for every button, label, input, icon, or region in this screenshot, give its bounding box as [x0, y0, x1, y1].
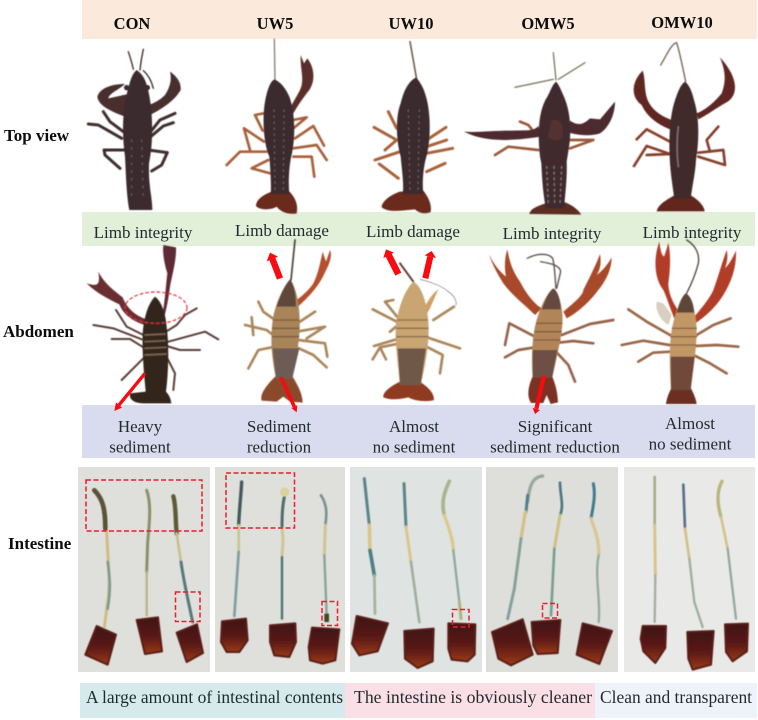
row label: Intestine: Intestine [8, 534, 72, 553]
crayfish abdomen: UW5 [245, 240, 331, 403]
caption: UW5 limb: Limb damage [235, 221, 329, 240]
crayfish top view: OMW10 [634, 43, 735, 211]
bottom summary: clean and transparent: Clean and transparent [600, 687, 752, 707]
caption: UW10 sediment: no sediment [373, 438, 456, 456]
crayfish abdomen: UW10 [373, 263, 460, 401]
green band: limb status [82, 212, 755, 246]
caption: OMW10 sediment: Almost [665, 414, 715, 433]
crayfish abdomen: OMW10 [622, 240, 738, 404]
crayfish top view: UW10 [374, 42, 453, 213]
column label: OMW10: OMW10 [651, 13, 713, 32]
row label: Abdomen: Abdomen [3, 322, 74, 341]
intestines [104, 530, 109, 627]
red arrow: CON sediment [114, 372, 146, 411]
caption: UW5 sediment: reduction [247, 438, 312, 456]
bottom summary: obviously cleaner [345, 683, 595, 718]
caption: OMW10 sediment: no sediment [649, 434, 732, 454]
bottom summary: large contents [80, 683, 345, 718]
column label: UW5: UW5 [257, 14, 293, 33]
caption: OMW5 sediment: Significant [518, 417, 592, 436]
caption: OMW5 sediment: sediment reduction [490, 438, 620, 456]
red arrow: UW10 right limb damage [422, 251, 436, 279]
caption: UW10 limb: Limb damage [366, 222, 460, 241]
red arrow: UW5 sediment [279, 377, 297, 412]
red dashed boxes on intestines [86, 473, 558, 627]
caption: UW5 sediment: Sediment [247, 417, 311, 436]
intestine photo panel: UW10 [350, 467, 482, 672]
purple band: sediment status [82, 405, 755, 458]
crayfish top view: CON [88, 49, 181, 210]
red arrow: UW5 limb damage [267, 253, 283, 280]
crayfish top view: UW5 [227, 39, 327, 214]
bottom summary: clean and transparent [595, 683, 757, 718]
caption: CON sediment: sediment [109, 438, 171, 456]
intestine photo panel: OMW10 [624, 467, 755, 672]
header band [82, 0, 757, 39]
crayfish abdomen: CON [87, 245, 218, 403]
column label: OMW5: OMW5 [521, 14, 575, 33]
caption: CON sediment: Heavy [118, 417, 162, 436]
crayfish abdomen: OMW5 [489, 249, 613, 404]
intestine photo panel: CON [78, 467, 210, 672]
bottom summary: large contents: A large amount of intestinal contents [86, 687, 343, 707]
bottom summary: obviously cleaner: The intestine is obviously cleaner [354, 687, 592, 707]
red arrow: UW10 left limb damage [383, 249, 401, 276]
intestine photo panel: UW5 [215, 467, 345, 672]
crayfish top view: OMW5 [464, 53, 615, 215]
dashed ellipse marker [125, 292, 187, 323]
column label: UW10: UW10 [389, 14, 433, 33]
caption: OMW5 limb: Limb integrity [503, 224, 602, 243]
tail pieces [85, 626, 116, 665]
column label: CON: CON [114, 14, 150, 33]
row label: Top view: Top view [4, 126, 70, 145]
caption: CON limb: Limb integrity [94, 223, 193, 242]
caption: UW10 sediment: Almost [389, 417, 439, 436]
intestine photo panel: OMW5 [486, 467, 618, 672]
caption: OMW10 limb: Limb integrity [643, 223, 742, 242]
red arrow: OMW5 sediment [533, 375, 546, 414]
